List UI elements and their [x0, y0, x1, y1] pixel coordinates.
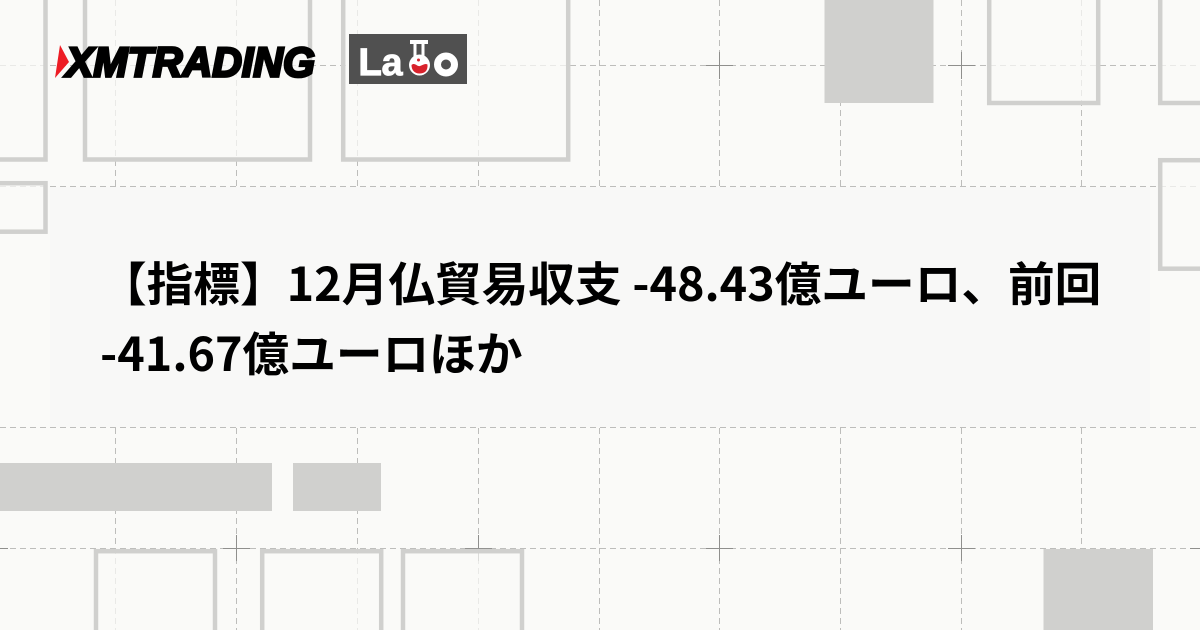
candlestick solid: top right [824, 0, 934, 103]
logo: Lab [349, 34, 467, 84]
title: 【指標】12月仏貿易収支 -48.43億ユーロ、前回 [100, 248, 1101, 314]
icon: flask [409, 40, 430, 76]
letter o [438, 56, 454, 73]
icon: red triangle [55, 45, 69, 78]
candlestick frames: top left [0, 0, 568, 232]
wordmark letters: L [358, 42, 382, 84]
candlestick bars: lower left [0, 463, 381, 511]
wordmark: XMTRADING [64, 38, 315, 86]
logo background [349, 34, 467, 84]
logo: Lab: a [382, 42, 404, 84]
title [100, 248, 1101, 384]
logo: XMTRADING [55, 38, 315, 86]
candlestick solid: bottom right [1044, 549, 1153, 630]
title: -41.67億ユーロほか [100, 318, 522, 384]
candlestick frames: top right [989, 0, 1200, 269]
candlestick frames: bottom [96, 551, 522, 630]
panel: title background [50, 187, 1150, 427]
